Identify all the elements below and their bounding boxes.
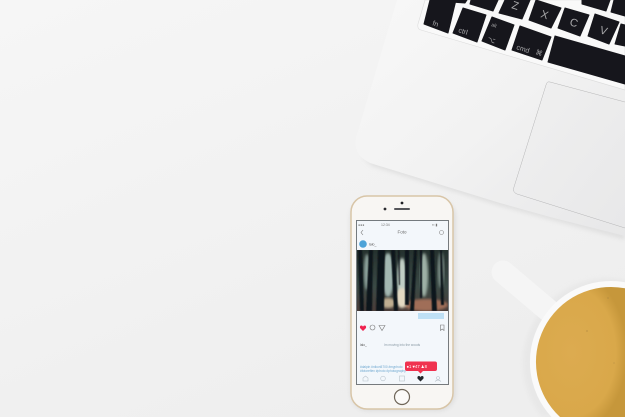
avatar bbox=[359, 240, 367, 248]
phone shadow bbox=[350, 199, 456, 411]
keyboard keys bbox=[424, 0, 625, 84]
trackpad edge bbox=[513, 82, 625, 228]
cup shadow bbox=[523, 278, 625, 417]
desk scene bbox=[348, 0, 625, 417]
key labels bbox=[431, 0, 609, 58]
caption text: Im moving into the woods bbox=[384, 343, 421, 347]
bookmark icon bbox=[440, 325, 444, 330]
home button bbox=[394, 390, 410, 404]
screen bbox=[356, 220, 448, 384]
key labels: X bbox=[539, 8, 550, 22]
front camera bbox=[401, 202, 403, 204]
status bar bbox=[358, 223, 437, 227]
heart icon bbox=[360, 326, 366, 331]
laptop body bbox=[356, 0, 625, 236]
status bar: 12:34 bbox=[381, 223, 390, 227]
notification badge bbox=[405, 362, 437, 374]
cup handle bbox=[503, 272, 548, 310]
caption: lalo_ bbox=[360, 343, 367, 347]
comment icon bbox=[370, 325, 375, 330]
back chevron bbox=[361, 230, 363, 235]
hashtags: #fotoreflex #photo #photography bbox=[360, 369, 406, 373]
tab bar bbox=[363, 376, 441, 382]
status bar: ▪▪ ▮ bbox=[432, 223, 437, 227]
key labels: C bbox=[568, 16, 579, 30]
share icon bbox=[379, 326, 385, 330]
active tab heart bbox=[417, 376, 424, 382]
username: lalo_ bbox=[369, 242, 376, 246]
notification badge: ●1 ♥47 ♟8 bbox=[406, 364, 428, 369]
key labels: ⌥ bbox=[486, 36, 496, 45]
refresh icon bbox=[440, 230, 444, 234]
sensor bbox=[384, 208, 386, 210]
key labels: ⌘ bbox=[534, 48, 544, 58]
keyboard well bbox=[418, 0, 625, 90]
coffee speckles bbox=[586, 297, 614, 364]
key labels: alt bbox=[490, 22, 498, 30]
phone body bbox=[351, 196, 453, 409]
key labels: V bbox=[598, 24, 609, 38]
hashtags: #dalpin #nikon5700 #myphoto bbox=[360, 365, 403, 369]
phone bbox=[350, 196, 456, 411]
status bar: ●●● bbox=[358, 223, 364, 227]
key labels: fn bbox=[431, 20, 439, 29]
blue button bbox=[418, 313, 444, 319]
laptop shadow bbox=[362, 156, 625, 240]
hashtags bbox=[360, 365, 406, 373]
navigation title: Foto bbox=[397, 230, 407, 234]
trackpad bbox=[513, 82, 625, 228]
photo of forest bbox=[357, 250, 448, 311]
laptop bbox=[356, 0, 625, 240]
cup rim bbox=[530, 281, 625, 417]
speaker bbox=[394, 208, 410, 210]
key labels: ctrl bbox=[457, 27, 469, 37]
coffee cup bbox=[503, 272, 625, 417]
coffee surface bbox=[536, 287, 625, 417]
key labels: cmd bbox=[515, 44, 530, 55]
